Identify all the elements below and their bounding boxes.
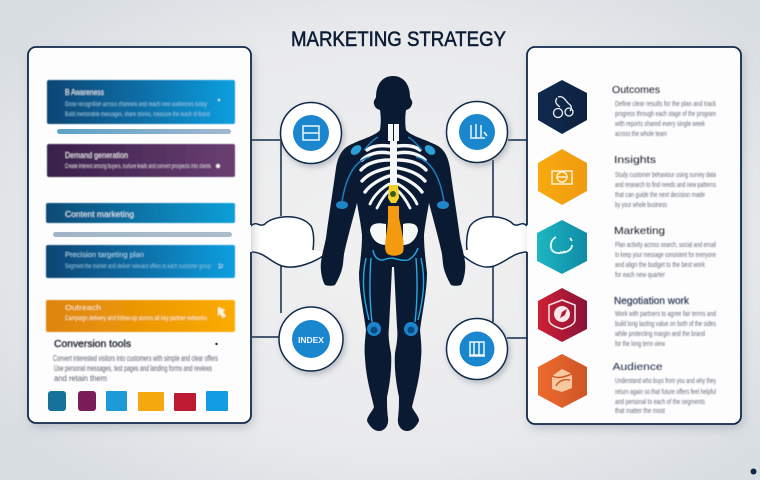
item 4: negotiation: Work with partners to agree fair terms and (615, 309, 716, 318)
card: orange outreach: Campaign delivery and follow-up across all key partner networks (65, 315, 208, 322)
colour swatches (48, 391, 228, 411)
neck vertebrae (388, 124, 399, 141)
progress pill 1 (57, 129, 231, 134)
icon circle: top right (446, 102, 508, 162)
body text: Use personal messages, test pages and landing forms and reviews (54, 364, 212, 373)
panel: right (527, 47, 741, 424)
card: precision targeting (46, 245, 235, 278)
hips and leg lines (363, 248, 424, 322)
item 4: negotiation: while protecting margin and the brand (614, 329, 705, 338)
item 2: insights (538, 149, 717, 209)
knee joints (367, 322, 418, 336)
item 2: insights: that can guide the next decision made (615, 190, 705, 199)
body text: and retain them (54, 374, 107, 383)
item 1: outcomes: across the whole team (615, 129, 667, 138)
item 4: negotiation: Negotiation work (614, 295, 690, 307)
card: awareness: Build memorable messages, share stories, measure the reach of brand (65, 111, 210, 118)
card: precision targeting: Segment the market and deliver relevant offers to each customer group (65, 263, 211, 270)
body text: Convert interested visitors into customers with simple and clear offers (53, 354, 218, 363)
item 3: marketing (537, 220, 716, 279)
item 3: marketing: Marketing (614, 225, 665, 237)
card: content marketing (46, 203, 235, 223)
ribcage (361, 146, 426, 208)
panel: left (28, 47, 251, 423)
item 1: outcomes: with reports shared every single week (614, 119, 705, 128)
card: orange outreach (46, 300, 235, 332)
item 5: audience: and personal to each of the segments (615, 397, 705, 406)
item 2: insights: Insights (614, 154, 656, 166)
human figure (321, 76, 465, 431)
card: precision targeting: Precision targeting plan (65, 252, 144, 259)
item 3: marketing: and align the budget to the best work (615, 260, 705, 269)
icon circle: bottom right (446, 318, 508, 380)
card: demand generation: Demand generation (65, 151, 128, 160)
card: orange outreach: Outreach (65, 303, 101, 312)
connectors: left (251, 140, 327, 337)
card: awareness: Grow recognition across channels and reach new audiences today (65, 101, 208, 108)
item 4: negotiation: for the long term view (615, 339, 665, 348)
item 2: insights: and research to find needs and new patterns (615, 180, 716, 189)
item 5: audience: Audience (612, 361, 663, 373)
card: demand generation: Create interest among buyers, nurture leads and convert prospects into clients (65, 163, 211, 170)
blue shoulder and arm details (336, 137, 449, 209)
item 1: outcomes (538, 80, 716, 138)
item 4: negotiation: build long lasting value on both of the sides (615, 319, 716, 328)
card: awareness (47, 80, 235, 124)
item 5: audience: return again so that future offers feel helpful (615, 387, 716, 396)
item 1: outcomes: progress through each stage of the program (615, 109, 716, 118)
item 4: negotiation (538, 288, 716, 348)
item 1: outcomes: Define clear results for the plan and track (615, 99, 716, 108)
card: awareness: B Awareness (65, 88, 104, 97)
card: content marketing: Content marketing (65, 210, 134, 219)
item 3: marketing: Plan activity across search, social and email (615, 240, 716, 249)
heading: conversion tools: Conversion tools (54, 338, 131, 350)
item 3: marketing: for each new quarter (615, 270, 665, 279)
card: precision targeting: 1r (218, 264, 223, 270)
icon circle: top left (280, 102, 342, 164)
spine (390, 141, 397, 196)
card: demand generation (47, 144, 235, 177)
icon circle: bottom left: INDEX (298, 335, 324, 345)
pelvis lobes (370, 223, 418, 245)
connectors: right (460, 140, 527, 338)
icon circle: bottom left (279, 307, 343, 371)
item 2: insights: by your whole business (615, 200, 667, 209)
title: MARKETING STRATEGY (291, 28, 506, 51)
orange spine organ (385, 206, 404, 256)
yellow chest detail (388, 185, 399, 203)
corner mark (750, 468, 756, 474)
item 2: insights: Study customer behaviour using survey data (615, 170, 717, 179)
item 5: audience: that matter the most (615, 406, 666, 415)
item 1: outcomes: Outcomes (612, 84, 660, 96)
progress pill 2 (53, 232, 232, 237)
item 5: audience (538, 354, 716, 415)
silhouette (321, 76, 465, 431)
body text (53, 354, 218, 383)
